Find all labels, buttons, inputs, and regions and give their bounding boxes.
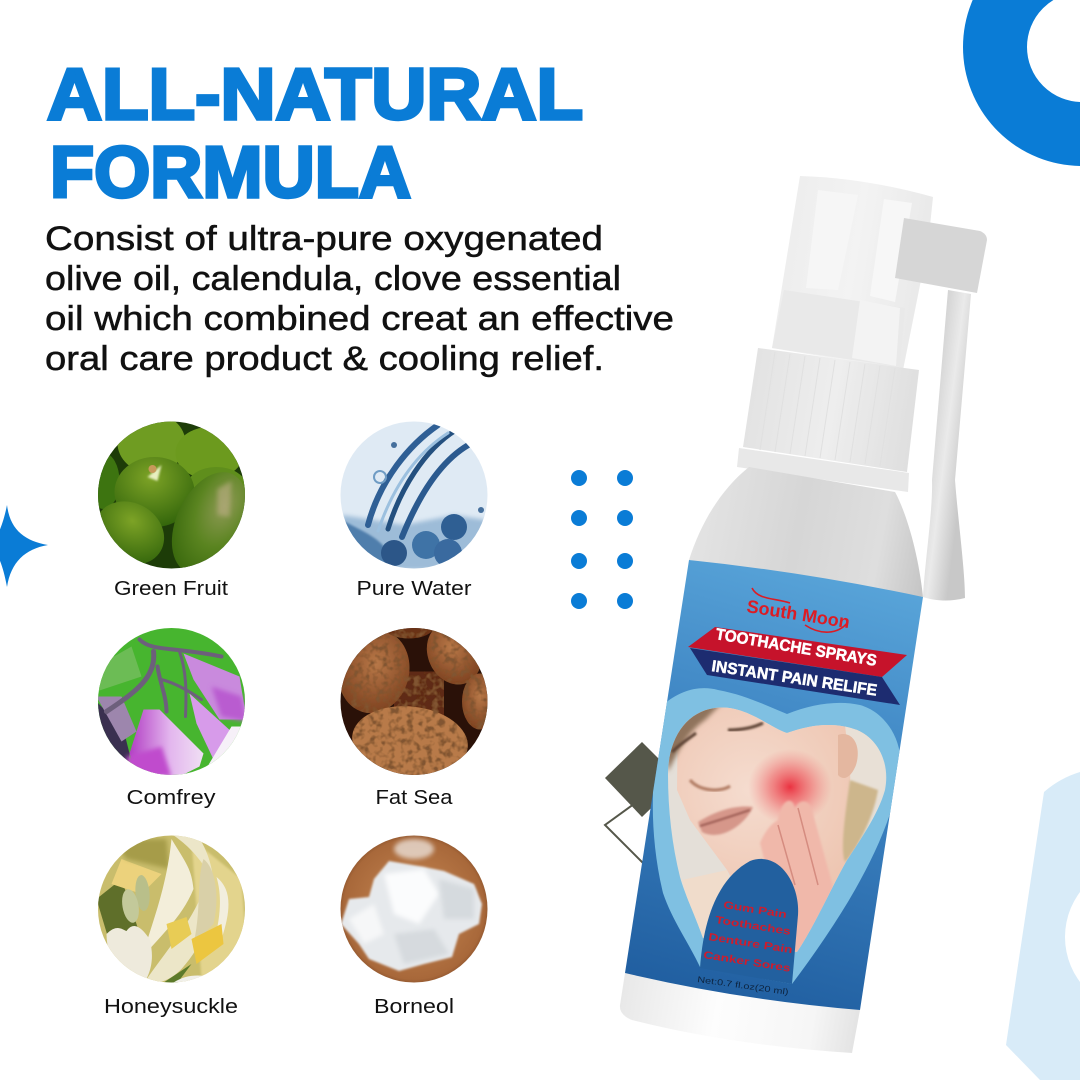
collar ring (737, 448, 909, 492)
ingredient: comfrey (96, 626, 246, 809)
label: borneol: Borneol (374, 995, 454, 1018)
banner subheading: INSTANT PAIN RELIFE (710, 658, 878, 700)
symptoms list: Canker Sores (703, 949, 792, 975)
label brand name: South Moon (745, 596, 851, 632)
heart photo (668, 708, 886, 952)
label: green fruit: Green Fruit (114, 577, 228, 600)
symptoms list (704, 902, 792, 972)
description text: oil which combined creat an effective (45, 300, 674, 338)
outlined diamond (605, 785, 660, 880)
background pale hexagon bottom right (1006, 772, 1080, 1080)
red banner (688, 627, 907, 677)
net weight: Net:0.7 fl.oz(20 ml) (697, 974, 789, 997)
ribbed collar (743, 348, 919, 472)
label: honeysuckle: Honeysuckle (104, 995, 238, 1018)
bottle label (625, 560, 923, 1010)
label: comfrey: Comfrey (126, 786, 216, 809)
ingredient: borneol (339, 834, 489, 1018)
description text: olive oil, calendula, clove essential (45, 260, 621, 298)
ingredient: honeysuckle (96, 834, 246, 1018)
brand swoosh (752, 588, 848, 632)
heart frame (653, 688, 901, 984)
symptoms arch (700, 859, 798, 984)
nozzle tube (923, 290, 971, 601)
solid dark diamond (605, 742, 680, 817)
label: fat sea: Fat Sea (376, 786, 453, 809)
description text: Consist of ultra-pure oxygenated (45, 220, 603, 258)
clear spray cap (772, 176, 933, 370)
description text (45, 220, 674, 378)
title: FORMULA (50, 133, 411, 213)
background ring top right (995, 0, 1080, 134)
banner heading: TOOTHACHE SPRAYS (714, 626, 878, 670)
label: pure water: Pure Water (356, 577, 472, 600)
description text: oral care product & cooling relief. (45, 340, 604, 378)
ingredient: fat sea (340, 628, 488, 804)
nozzle head (895, 218, 987, 293)
title (47, 55, 583, 213)
four point star (0, 505, 48, 587)
dot grid (571, 470, 633, 609)
symptoms list: Gum Pain (723, 899, 788, 921)
spray bottle (610, 176, 987, 1053)
symptoms list: Denture Pain (708, 931, 793, 956)
title: ALL-NATURAL (47, 55, 583, 135)
symptoms list: Toothaches (715, 914, 792, 938)
bottle base (620, 973, 860, 1053)
ingredient: pure water (339, 420, 489, 600)
navy banner (690, 648, 900, 705)
bottle body (689, 467, 923, 597)
ingredient: green fruit (98, 422, 245, 595)
